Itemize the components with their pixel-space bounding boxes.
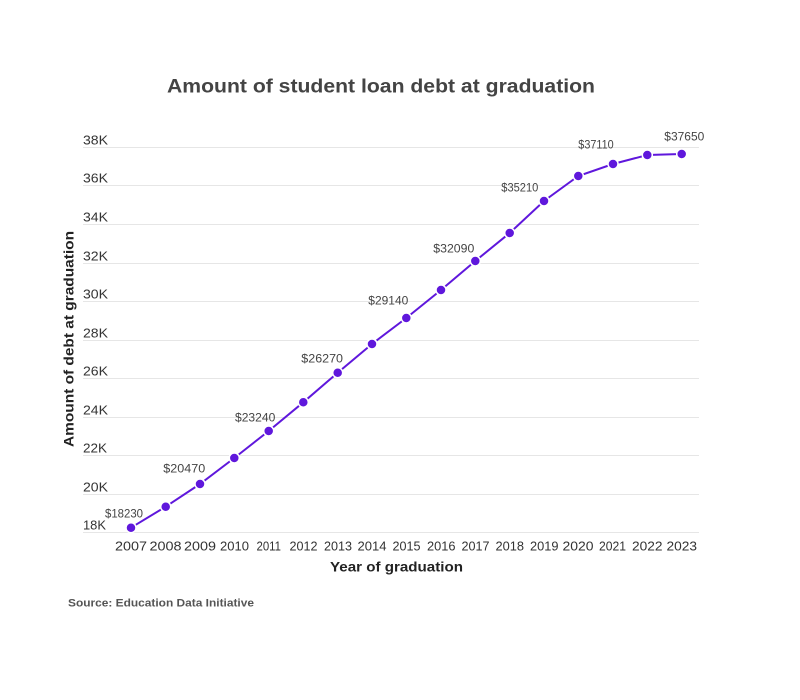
x-axis year labels: 2007	[115, 538, 147, 554]
x-axis year labels: 2009	[184, 538, 216, 554]
data value labels: $32090	[433, 243, 474, 255]
data value labels	[105, 131, 704, 520]
data value labels: $18230	[105, 508, 143, 520]
y-axis tick labels: 30K	[83, 286, 108, 301]
y-axis tick labels: 26K	[83, 363, 108, 378]
y-axis title: Amount of debt at graduation	[60, 231, 76, 447]
x-axis year labels: 2013	[324, 538, 352, 554]
y-axis tick labels: 24K	[83, 402, 108, 417]
y-axis tick labels: 36K	[83, 170, 108, 185]
x-axis title: Year of graduation	[330, 559, 463, 575]
y-axis tick labels	[83, 132, 108, 532]
data value labels: $23240	[235, 412, 275, 424]
data value labels: $26270	[301, 353, 343, 365]
data value labels: $35210	[501, 182, 538, 194]
source note: Source: Education Data Initiative	[68, 598, 254, 610]
y-axis tick labels: 34K	[83, 209, 108, 224]
x-axis year labels: 2015	[392, 538, 420, 554]
y-axis tick labels: 28K	[83, 325, 108, 340]
y-axis tick labels: 18K	[83, 517, 106, 532]
x-axis year labels: 2017	[462, 538, 490, 554]
data value labels: $37650	[664, 131, 704, 143]
y-axis tick labels: 38K	[83, 132, 108, 147]
x-axis year labels: 2008	[150, 538, 182, 554]
data value labels: $29140	[368, 295, 408, 307]
x-axis year labels: 2014	[358, 538, 386, 554]
x-axis year labels: 2023	[666, 538, 697, 554]
y-axis tick labels: 22K	[83, 440, 107, 455]
x-axis year labels: 2019	[530, 538, 558, 554]
title: Amount of student loan debt at graduation	[167, 75, 595, 97]
x-axis year labels: 2022	[632, 538, 662, 554]
y-axis tick labels: 32K	[83, 248, 108, 263]
x-axis year labels: 2018	[496, 538, 524, 554]
x-axis year labels: 2010	[220, 538, 249, 554]
data value labels: $37110	[578, 139, 614, 151]
x-axis year labels: 2012	[290, 538, 318, 554]
data line with markers	[126, 149, 687, 533]
x-axis year labels	[115, 538, 697, 554]
x-axis year labels: 2020	[562, 538, 594, 554]
x-axis year labels: 2016	[427, 538, 456, 554]
x-axis year labels: 2011	[256, 538, 281, 554]
data value labels: $20470	[163, 463, 205, 475]
x-axis year labels: 2021	[599, 538, 626, 554]
y-axis tick labels: 20K	[83, 479, 108, 494]
